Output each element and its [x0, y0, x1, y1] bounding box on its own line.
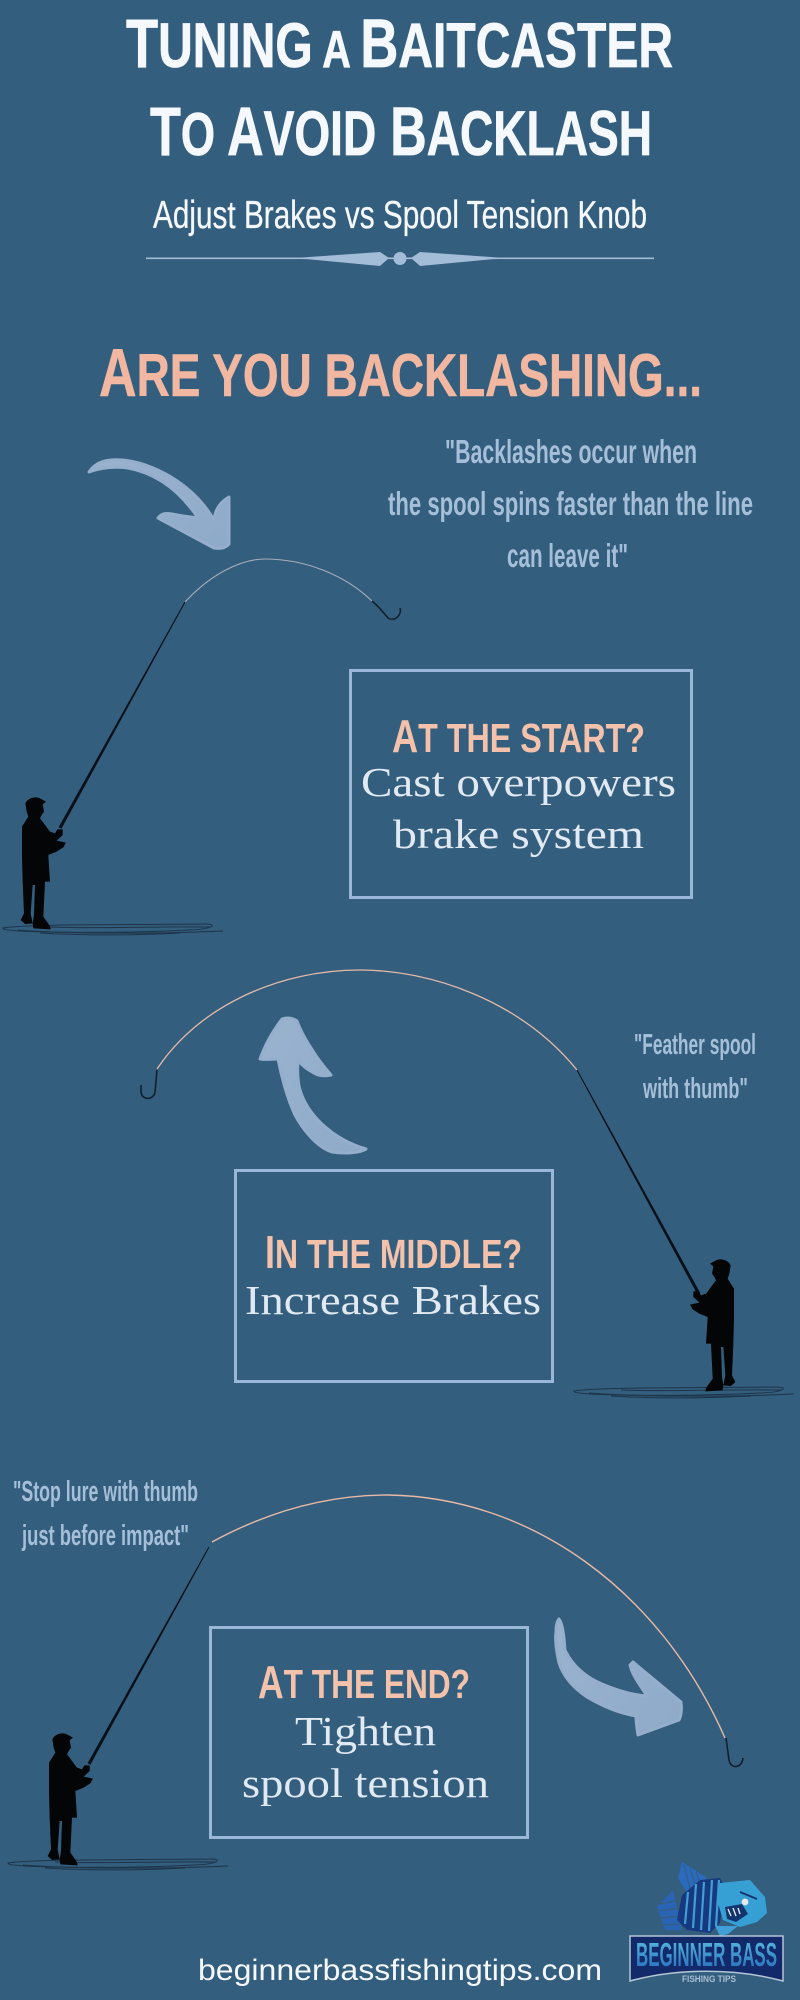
logo tagline: FISHING TIPS	[682, 1974, 736, 1985]
title: TUNING A BAITCASTER	[126, 5, 673, 82]
cast 3: line, rod and hook	[88, 1495, 743, 1767]
panel heading: at the end: AT THE END?	[258, 1656, 470, 1708]
quote: backlashes occur	[388, 433, 753, 574]
arrow: end of cast, pointing right	[556, 1619, 681, 1735]
title divider ornament	[146, 252, 654, 266]
panel body: tighten spool tension: spool tension	[242, 1760, 489, 1806]
panel: at the start	[350, 670, 692, 898]
panel: in the middle	[236, 1170, 552, 1382]
subtitle: Adjust Brakes vs Spool Tension Knob	[153, 194, 647, 237]
panel: at the end	[210, 1628, 528, 1838]
quote: stop lure: "Stop lure with thumb	[13, 1476, 198, 1508]
angler silhouette 3	[8, 1733, 228, 1870]
panel body: tighten spool tension: Tighten	[295, 1708, 436, 1754]
angler silhouette 2	[574, 1259, 794, 1398]
quote: backlashes occur: can leave it"	[507, 537, 628, 574]
quote: stop lure: just before impact"	[21, 1520, 189, 1552]
cast 2: line, rod and hook	[141, 970, 700, 1295]
arrow: first cast, pointing down	[89, 460, 229, 548]
title	[126, 5, 673, 170]
icon: skeletal bass	[657, 1862, 767, 1936]
panel heading: in the middle: IN THE MIDDLE?	[265, 1226, 522, 1278]
title: TO AVOID BACKLASH	[150, 93, 652, 170]
angler silhouette 1	[3, 797, 223, 935]
cast 1: line, rod and hook	[59, 559, 400, 829]
logo: beginner bass fishing tips	[630, 1862, 783, 1985]
quote: feather spool	[634, 1029, 756, 1105]
panel body: increase brakes: Increase Brakes	[245, 1277, 541, 1323]
panel body: cast overpowers brake system	[361, 759, 676, 857]
website url: beginnerbassfishingtips.com	[198, 1954, 602, 1987]
panel body: cast overpowers brake system: brake system	[393, 811, 644, 857]
panel body: cast overpowers brake system: Cast overpowers	[361, 759, 676, 805]
quote: stop lure	[13, 1476, 198, 1552]
panel body: tighten spool tension	[242, 1708, 489, 1806]
arrow: mid cast, pointing up	[260, 1018, 366, 1153]
panel heading: at the start: AT THE START?	[392, 710, 645, 762]
logo banner	[630, 1936, 783, 1981]
